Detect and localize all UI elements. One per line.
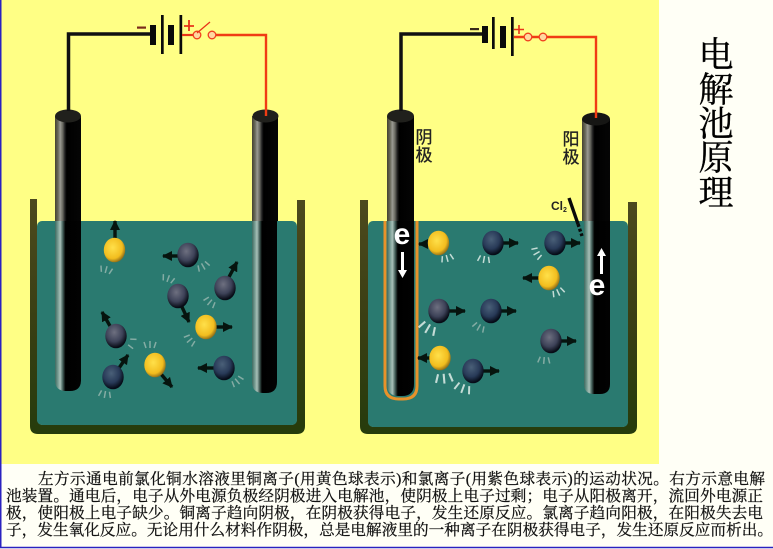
chlorine gas label and arrow: Cl xyxy=(551,199,563,213)
label: cathode second character: 极 xyxy=(416,146,432,165)
electron flow down in cathode xyxy=(394,218,410,278)
caption text block: 子，发生氧化反应。无论用什么材料作阴极，总是电解液里的一种离子在阴极获得电子，发生还原反应而析出。 xyxy=(6,520,773,539)
panel: left cell before electrolysis xyxy=(30,15,305,434)
panel: right cell during electrolysis xyxy=(360,17,637,434)
title: 电 xyxy=(698,36,734,75)
ions right cell xyxy=(418,231,580,396)
circuit wires and battery right xyxy=(401,17,596,118)
caption text block xyxy=(6,469,773,539)
electron flow up in anode: e xyxy=(589,269,605,302)
cathode rod xyxy=(387,110,414,396)
solution right xyxy=(368,221,628,427)
circuit wires and battery left xyxy=(68,15,266,116)
caption text block: 池装置。通电后，电子从外电源负极经阴极进入电解池，使阴极上电子过剩；电子从阳极离开，流回外电源正 xyxy=(6,486,763,505)
title: 解 xyxy=(698,71,734,110)
chlorine gas label and arrow: 2 xyxy=(563,207,567,214)
electrode right rod xyxy=(252,110,278,393)
caption text block: 极，使阳极上电子缺少。铜离子趋向阴极，在阴极获得电子，发生还原反应。氯离子趋向阳极，在阳极失去电 xyxy=(6,503,763,522)
label: anode second character: 极 xyxy=(562,148,580,167)
anode rod xyxy=(582,112,610,394)
caption text block: 左方示通电前氯化铜水溶液里铜离子(用黄色球表示)和氯离子(用紫色球表示)的运动状况。右方示意电解 xyxy=(38,469,765,488)
title: 池 xyxy=(698,105,734,144)
copper coating on cathode xyxy=(385,221,417,399)
title: 原 xyxy=(698,139,734,178)
beaker right xyxy=(360,200,637,434)
yellow background panel xyxy=(1,0,659,464)
solution left xyxy=(37,221,297,425)
ions left cell xyxy=(98,221,244,399)
title xyxy=(698,36,734,213)
label: cathode: 阴 xyxy=(416,128,432,147)
label: anode: 阳 xyxy=(562,130,580,149)
electron flow down in cathode: e xyxy=(394,218,410,251)
beaker left xyxy=(30,199,305,434)
electrode left rod xyxy=(55,110,81,391)
title: 理 xyxy=(698,174,734,213)
chlorine gas label and arrow xyxy=(551,198,582,236)
electron flow up in anode xyxy=(589,248,606,302)
